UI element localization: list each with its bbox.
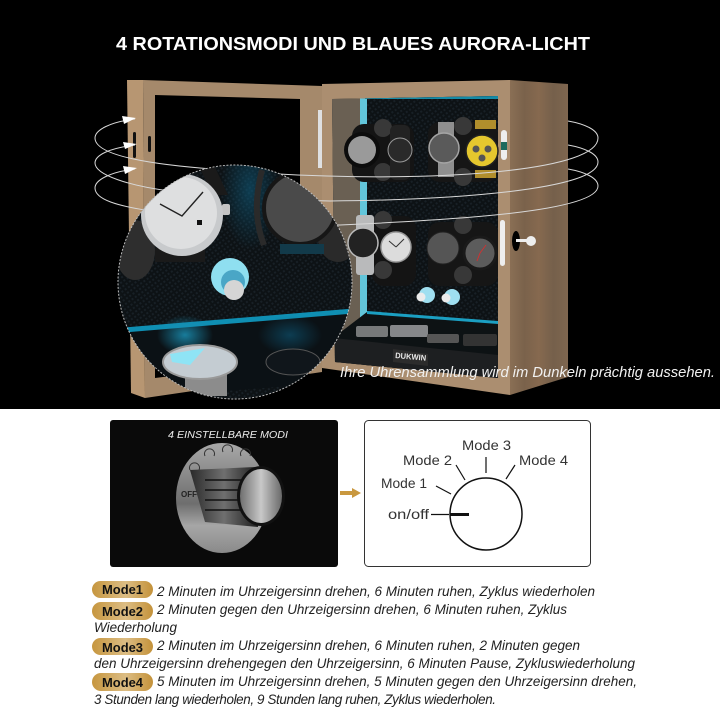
mode 3 description xyxy=(92,638,635,671)
icon: rotary knob xyxy=(176,443,285,553)
panel: black hero background xyxy=(0,0,720,409)
panel heading: 4 EINSTELLBARE MODI xyxy=(168,430,288,441)
mode 2 description: 2 Minuten gegen den Uhrzeigersinn drehen, 6 Minuten ruhen, Zyklus xyxy=(156,602,567,617)
dial labels: Mode 2 xyxy=(403,452,452,468)
storage drawer with watches xyxy=(356,325,497,346)
icon: rotary knob: OFF xyxy=(181,490,197,499)
watch holders upper row xyxy=(344,117,498,186)
mode 4 description: 5 Minuten im Uhrzeigersinn drehen, 5 Minuten gegen den Uhrzeigersinn drehen, xyxy=(157,674,637,689)
panel: mode dial diagram xyxy=(364,420,590,566)
watch winder cabinet xyxy=(322,80,568,395)
dial labels: Mode 4 xyxy=(519,452,568,468)
brand label DUKWIN: DUKWIN xyxy=(395,351,427,363)
mode 4 description xyxy=(92,673,637,707)
title: 4 ROTATIONSMODI UND BLAUES AURORA-LICHT xyxy=(116,33,591,54)
open watch winder door xyxy=(127,80,327,398)
control knobs xyxy=(416,287,460,305)
brand label DUKWIN xyxy=(393,349,428,366)
mode 2 description xyxy=(92,602,567,635)
mode 1 description: 2 Minuten im Uhrzeigersinn drehen, 6 Minuten ruhen, Zyklus wiederholen xyxy=(156,584,595,599)
caption on hero: Ihre Uhrensammlung wird im Dunkeln prächtig aussehen. xyxy=(340,364,715,381)
panel: adjustable modes knob photo xyxy=(110,420,338,567)
mode 3 description: den Uhrzeigersinn drehengegen den Uhrzeigersinn, 6 Minuten Pause, Zykluswiederholung xyxy=(94,656,635,671)
arrow xyxy=(340,488,361,498)
door clips and lock with key xyxy=(500,130,536,266)
magnified silver watch xyxy=(141,165,230,262)
mode 2 description: Mode2 xyxy=(102,604,143,619)
dial labels xyxy=(381,437,568,522)
mode 3 description: Mode3 xyxy=(102,640,143,655)
mode 1 description: Mode1 xyxy=(102,582,143,597)
magnifier circle detail xyxy=(118,164,352,400)
mode 2 description: Wiederholung xyxy=(94,620,177,635)
dial xyxy=(431,457,522,550)
dial labels: Mode 1 xyxy=(381,475,427,491)
watch holders lower row xyxy=(348,211,498,286)
magnified drawer watches xyxy=(163,345,320,396)
mode 4 description: Mode4 xyxy=(102,675,144,690)
magnified control knob xyxy=(211,258,249,300)
dial labels: on/off xyxy=(388,506,429,522)
magnified empty-dial watch xyxy=(257,170,336,254)
mode 4 description: 3 Stunden lang wiederholen, 9 Stunden lang ruhen, Zyklus wiederholen. xyxy=(94,692,496,707)
rotation arrows xyxy=(95,116,598,225)
mode 3 description: 2 Minuten im Uhrzeigersinn drehen, 6 Minuten ruhen, 2 Minuten gegen xyxy=(156,638,580,653)
dial labels: Mode 3 xyxy=(462,437,511,453)
